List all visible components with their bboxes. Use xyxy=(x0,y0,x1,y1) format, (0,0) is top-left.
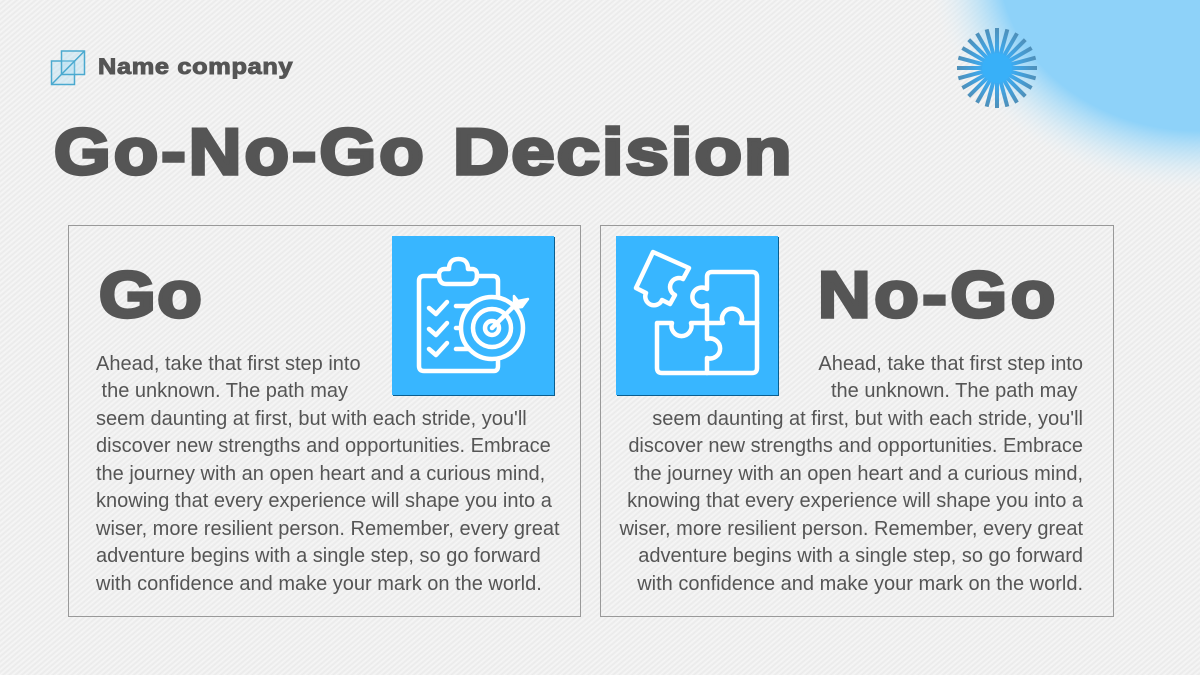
icon: company logo cubes xyxy=(50,50,86,86)
icon: sunburst xyxy=(957,28,1037,108)
heading: no-go: No-Go xyxy=(818,258,1058,331)
panel: no-go xyxy=(600,225,1114,617)
title: Decision xyxy=(453,114,793,188)
icon: puzzle pieces xyxy=(616,236,778,395)
title: Go-No-Go xyxy=(54,114,426,188)
heading: go: Go xyxy=(99,258,203,331)
company name: Name company xyxy=(98,54,293,79)
icon: clipboard with target xyxy=(392,236,554,395)
text: no-go description: Ahead, take that first step into the unknown. The path may seem daunting at first, but with each stride, you'll discover new strengths and opportunities. Embrace the journey with an open heart and a curious mind, knowing that every experience will shape you into a wiser, more resilient person. Remember, every great adventure begins with a single step, so go forward with confidence and make your mark on the world. xyxy=(619,353,1083,595)
panel: go xyxy=(68,225,581,617)
title xyxy=(54,114,793,188)
text: go description: Ahead, take that first step into the unknown. The path may seem daunting at first, but with each stride, you'll discover new strengths and opportunities. Embrace the journey with an open heart and a curious mind, knowing that every experience will shape you into a wiser, more resilient person. Remember, every great adventure begins with a single step, so go forward with confidence and make your mark on the world. xyxy=(96,353,560,595)
